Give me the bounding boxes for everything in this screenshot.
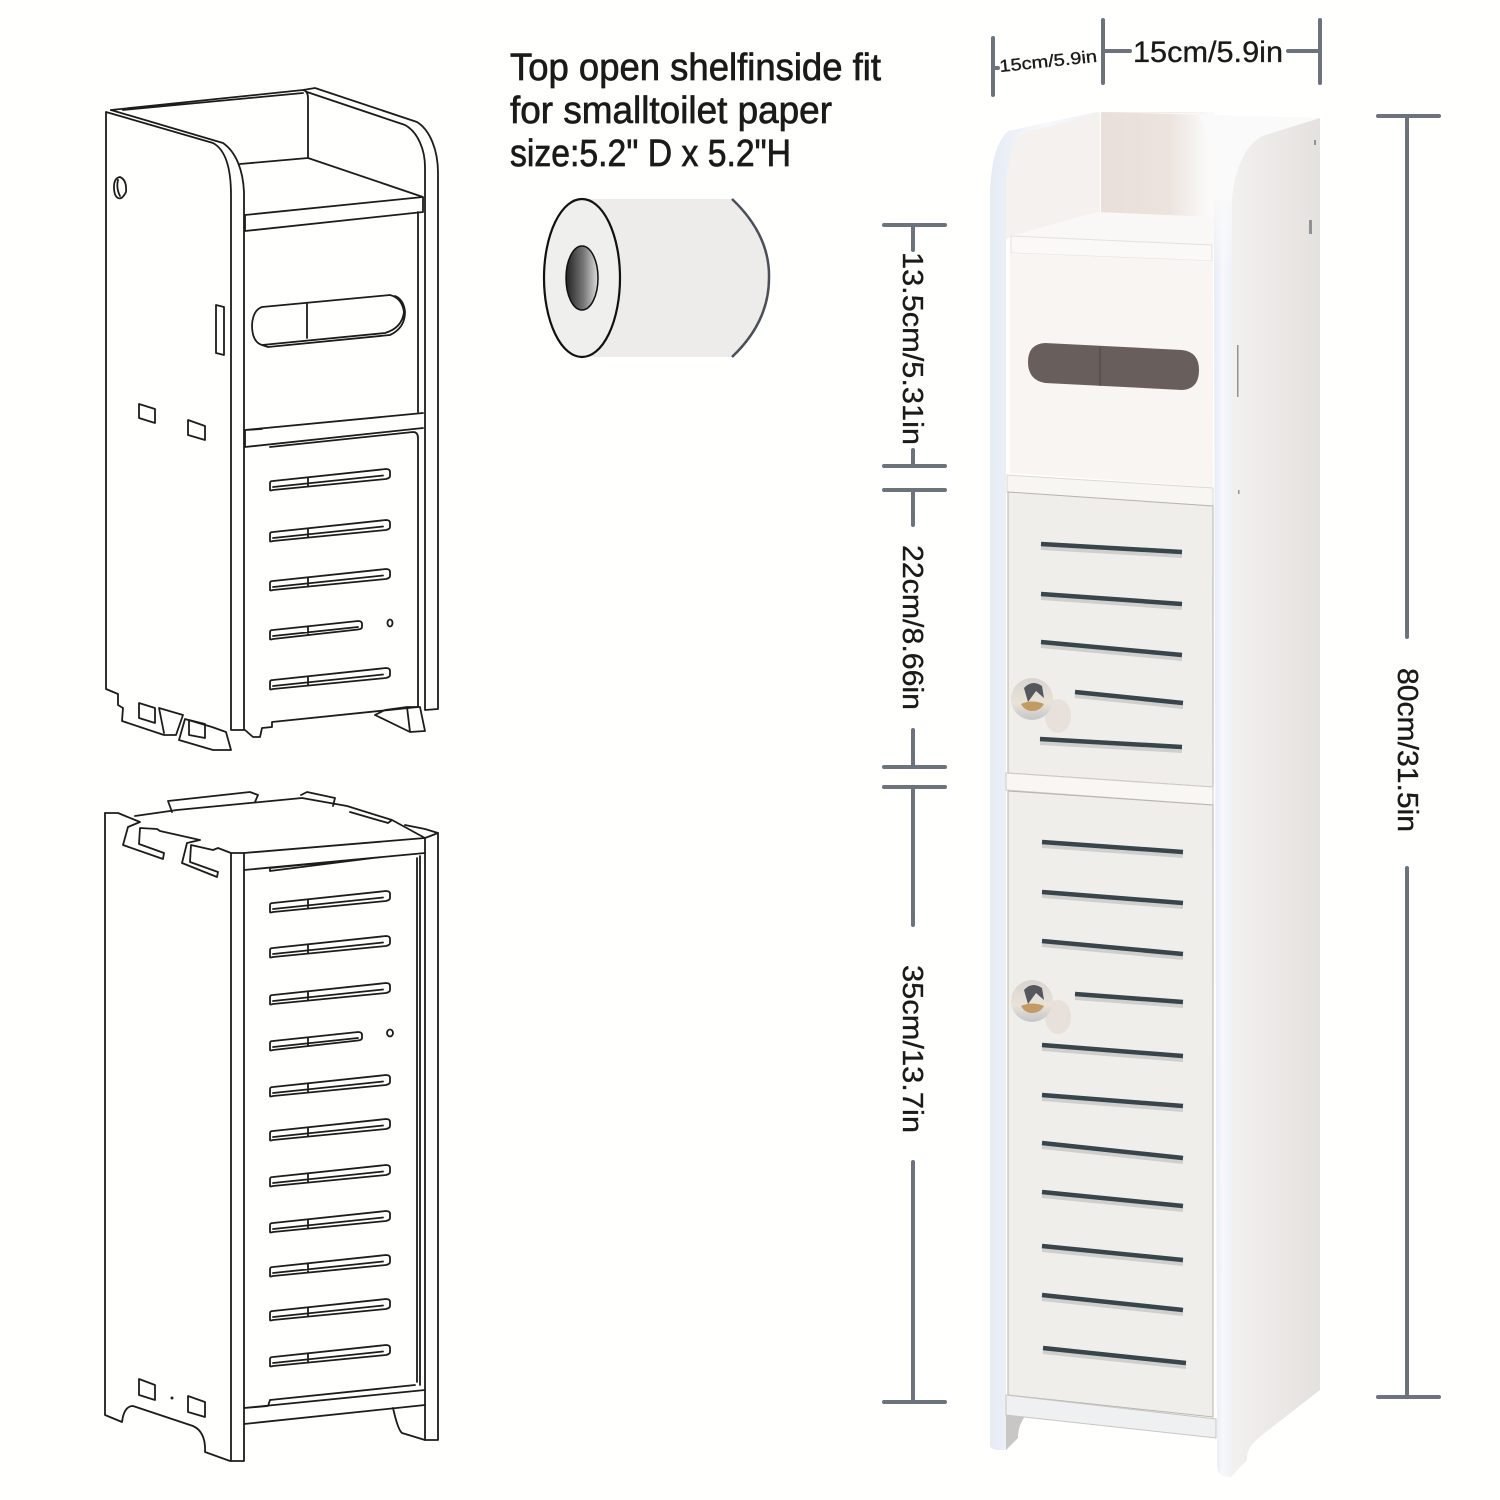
- heading: shelf description: size:5.2" D x 5.2"H: [510, 133, 791, 175]
- knob upper: [1011, 678, 1071, 733]
- inner left wall: [1006, 113, 1100, 240]
- tissue slot: [1028, 343, 1199, 390]
- side panel holes: [1237, 140, 1316, 494]
- lower door: [1008, 791, 1213, 1417]
- dimension: top widths: 15cm/5.9in: [998, 47, 1098, 76]
- drawer face and slot: [245, 212, 423, 447]
- line drawing: cabinet with top shelf: [106, 88, 438, 750]
- back wall: [1101, 112, 1214, 217]
- drawer: [1010, 253, 1213, 487]
- dimension: section heights: 22cm/8.66in: [896, 545, 928, 710]
- heading: shelf description: for smalltoilet paper: [510, 90, 832, 132]
- left front strip: [990, 112, 1100, 1450]
- line drawing: lower cabinet section: [105, 792, 438, 1461]
- side panel details: [114, 177, 224, 738]
- shelf lip: [1011, 236, 1212, 261]
- dimension: top widths: 15cm/5.9in: [1133, 36, 1283, 69]
- side cutouts: [139, 1379, 205, 1417]
- back and right panel: [111, 88, 438, 710]
- side panel: [106, 110, 244, 750]
- upper door slats: [1040, 544, 1183, 751]
- door hole: [388, 620, 392, 626]
- top edge: [1101, 112, 1320, 200]
- door edge: [244, 856, 425, 1440]
- slats: [270, 891, 390, 912]
- heading: shelf description: Top open shelfinside fit: [510, 47, 881, 89]
- bottom rail: [1006, 1395, 1216, 1438]
- shelf between doors: [1006, 773, 1213, 805]
- upper door: [1008, 492, 1213, 787]
- dimension: total height: [1378, 116, 1439, 1397]
- side panel: [1230, 118, 1320, 1478]
- divider shelf: [1007, 475, 1213, 506]
- dimension: section heights: 35cm/13.7in: [896, 965, 928, 1133]
- dimension: total height: 80cm/31.5in: [1391, 668, 1423, 832]
- right front strip: [1214, 200, 1232, 1477]
- shelf rail: [244, 853, 425, 871]
- dimension: section heights: 13.5cm/5.31in: [896, 252, 928, 445]
- strip top fade: [1214, 190, 1232, 270]
- icon: toilet paper roll: [544, 199, 769, 357]
- left foot: [1006, 1415, 1026, 1450]
- photo: white bathroom cabinet: [990, 112, 1320, 1478]
- shelf top: [1011, 212, 1214, 245]
- door hole: [387, 1030, 393, 1036]
- heading: shelf description: [510, 47, 881, 175]
- dimension: section heights: [884, 225, 945, 1402]
- knob lower: [1011, 980, 1071, 1034]
- slats: [270, 469, 390, 490]
- tops and tabs: [105, 792, 438, 877]
- dimension: top widths: [993, 20, 1320, 95]
- door outline: [245, 432, 418, 737]
- lower door slats: [1042, 842, 1186, 1367]
